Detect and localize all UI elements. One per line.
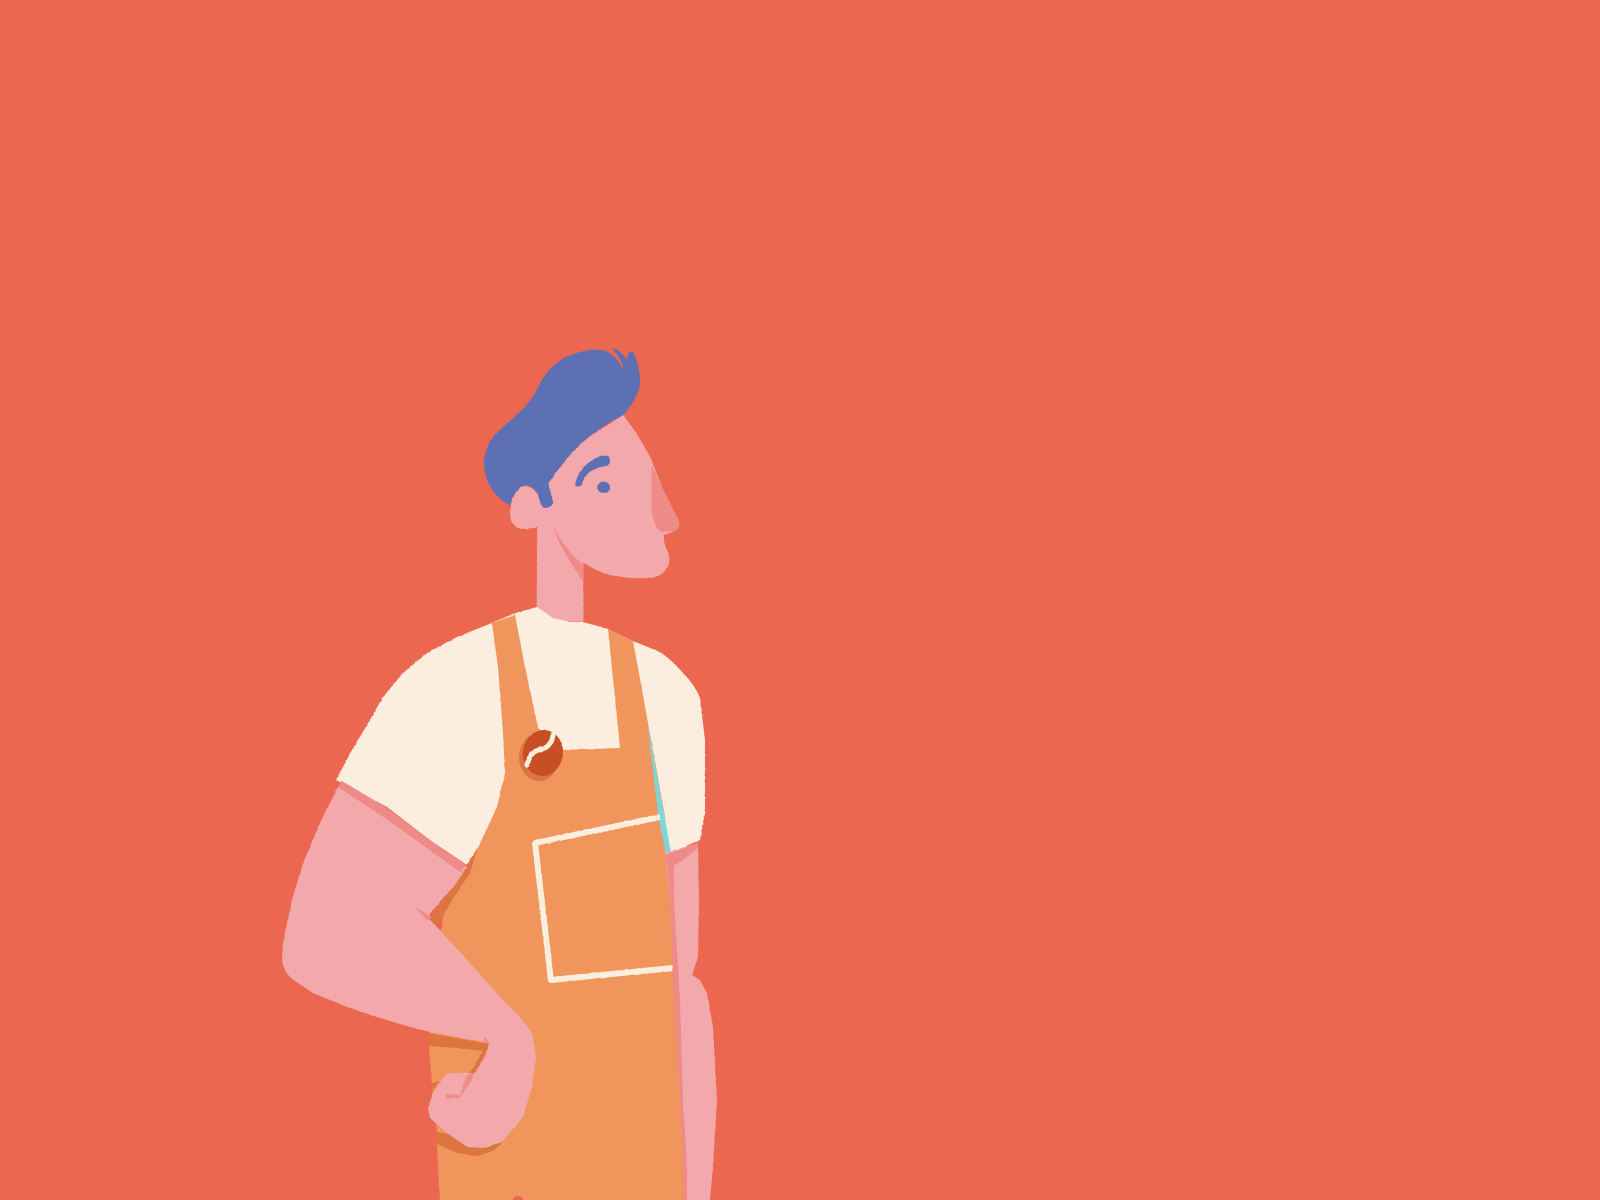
- eyebrow: [575, 456, 610, 487]
- t-shirt: [336, 607, 705, 890]
- eye: [597, 482, 610, 493]
- coffee bean badge: [519, 727, 566, 781]
- bean crease: [527, 735, 553, 765]
- shadow beside arm: [430, 847, 478, 927]
- shadow under hand: [437, 1132, 502, 1156]
- ear: [510, 486, 547, 529]
- sleeve shadow: [338, 781, 466, 872]
- neck: [537, 507, 583, 622]
- left arm and hand: [282, 781, 536, 1148]
- hair: [484, 348, 640, 508]
- badge shadow: [519, 733, 559, 781]
- right arm shadow: [665, 843, 698, 1200]
- apron bottom notch: [513, 1196, 523, 1200]
- figure: [282, 348, 717, 1200]
- right arm: [665, 843, 717, 1200]
- thumb shadow: [445, 1072, 475, 1099]
- apron shadows: [429, 847, 502, 1156]
- left arm skin: [282, 787, 536, 1148]
- wrist crease: [484, 1037, 489, 1043]
- shadow by thumb: [432, 1081, 440, 1090]
- head and neck: [484, 348, 679, 622]
- neck shadow: [554, 527, 583, 582]
- badge bean: [520, 727, 566, 779]
- apron: [429, 615, 685, 1200]
- right arm skin: [665, 843, 717, 1200]
- arm notch shadow: [415, 907, 432, 920]
- nose shadow: [652, 465, 679, 532]
- shadow under forearm: [429, 1033, 489, 1075]
- face: [540, 415, 679, 578]
- apron pocket: [535, 817, 673, 980]
- cyan strap edge: [648, 725, 671, 855]
